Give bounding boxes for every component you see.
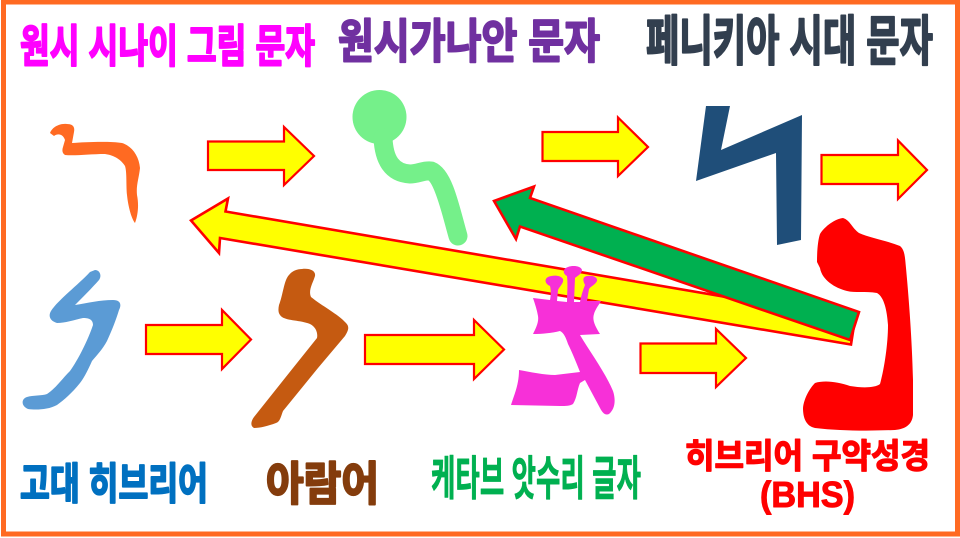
arrow: paleo-hebrew to aramaic [146, 310, 251, 369]
heading: 원시 시나이 그림 문자: 원시 시나이 그림 문자 [20, 21, 315, 72]
glyph: proto-Sinaitic orange [50, 124, 140, 223]
long yellow arrow: BHS back to proto-Sinaitic [191, 198, 855, 344]
glyph: Paleo-Hebrew blue [23, 270, 120, 410]
glyph: proto-Canaanite green [352, 90, 458, 236]
arrow: canaanite to phoenician [542, 118, 648, 176]
arrow: sinai to canaanite [208, 127, 314, 185]
label: 히브리어 구약성경 (BHS): (BHS) [760, 474, 855, 515]
label: 케타브 앗수리 글자: 케타브 앗수리 글자 [431, 452, 641, 505]
green arrow: BHS back to proto-Canaanite [494, 186, 859, 340]
label: 아람어: 아람어 [266, 458, 379, 510]
glyph: Aramaic brown [251, 269, 348, 428]
arrow: phoenician onward [822, 140, 927, 199]
glyph: Phoenician navy [696, 106, 802, 245]
label: 고대 히브리어: 고대 히브리어 [20, 461, 208, 509]
label: 히브리어 구약성경 (BHS): 히브리어 구약성경 [685, 438, 930, 476]
arrow: aramaic to ketav ashuri [365, 320, 504, 379]
glyph: Hebrew Bible red [803, 218, 913, 431]
glyph: Ketav Ashuri magenta [511, 266, 615, 415]
heading: 원시가나안 문자: 원시가나안 문자 [338, 15, 600, 68]
arrow: ketav ashuri to BHS [640, 329, 746, 387]
label: 히브리어 구약성경 (BHS) [685, 438, 930, 515]
